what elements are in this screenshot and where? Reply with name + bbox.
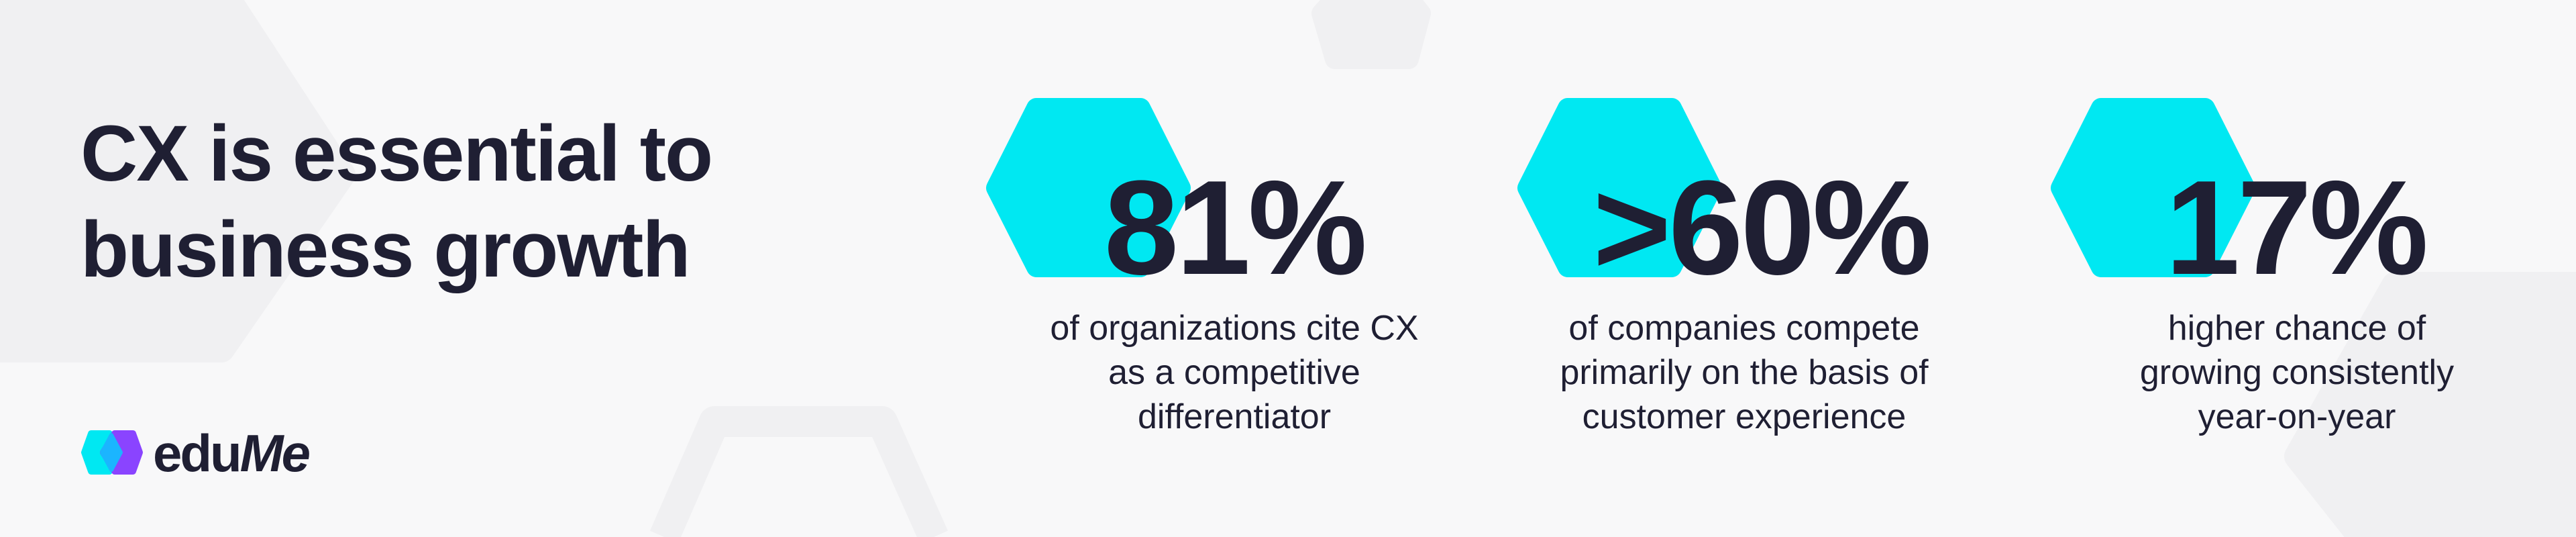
description 2: customer experience	[1582, 397, 1906, 436]
stat 1	[1050, 153, 1419, 436]
hex: stat 2	[1527, 108, 1712, 267]
background hex: top middle	[1322, 0, 1421, 59]
background hex: left	[0, 0, 342, 349]
description 3: higher chance of	[2168, 309, 2426, 348]
logo icon	[85, 434, 140, 471]
description 1: of organizations cite CX	[1050, 309, 1419, 348]
description 1	[1050, 309, 1419, 436]
description 3	[2140, 309, 2454, 436]
title: CX is essential to	[80, 109, 712, 198]
logo text: eduMe	[153, 424, 309, 483]
description 3: year-on-year	[2198, 397, 2396, 436]
description 1: as a competitive	[1108, 353, 1360, 392]
number: 17%: 17%	[2165, 153, 2426, 303]
stat 2	[1560, 153, 1929, 436]
title: business growth	[80, 205, 690, 294]
hex: stat 1	[996, 108, 1181, 267]
description 1: differentiator	[1138, 397, 1331, 436]
number: 81%: 81%	[1104, 153, 1364, 303]
description 3: growing consistently	[2140, 353, 2454, 392]
description 2: primarily on the basis of	[1560, 353, 1929, 392]
background hex: bottom right	[2298, 285, 2576, 537]
stat 3	[2140, 153, 2454, 436]
title	[80, 109, 712, 294]
description 2: of companies compete	[1568, 309, 1920, 348]
description 2	[1560, 309, 1929, 436]
hex: stat 3	[2061, 108, 2245, 267]
number: >60%: >60%	[1593, 153, 1929, 303]
background hex outline: bottom	[664, 422, 934, 537]
